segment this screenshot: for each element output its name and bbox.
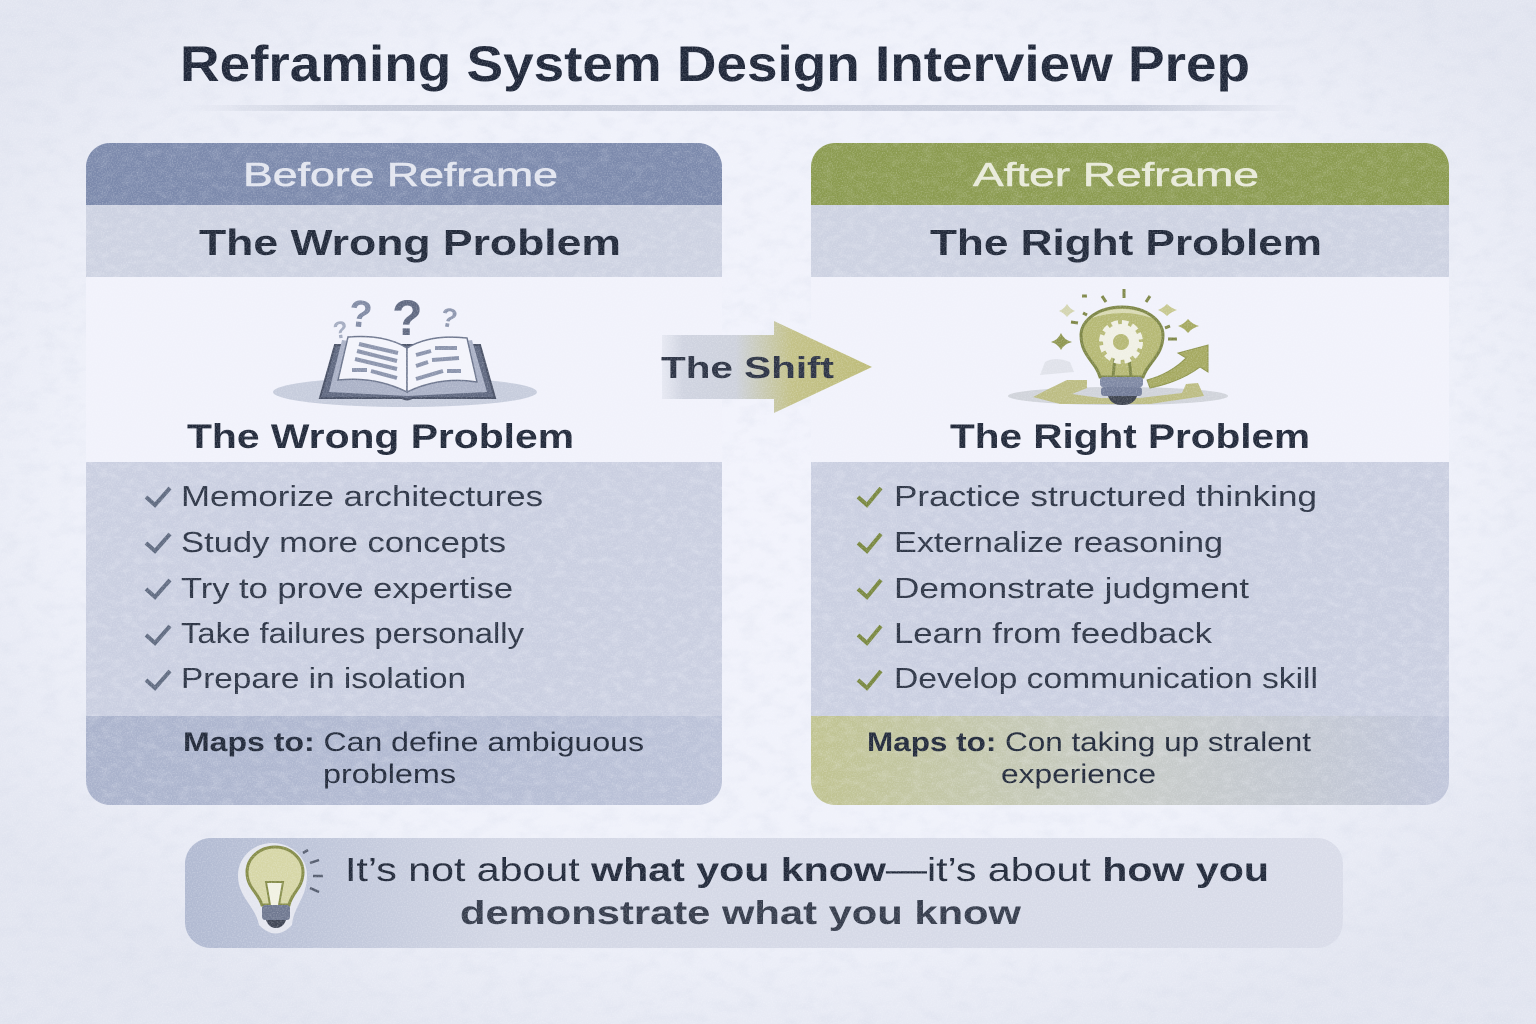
heading: the right problem: The Right Problem: [950, 418, 1310, 456]
footer: maps to (before): problems: [323, 759, 456, 789]
list item 4: Learn from feedback: [894, 618, 1213, 650]
list item 4: [144, 622, 524, 649]
list item 1: Memorize architectures: [181, 481, 543, 513]
icon: light bulb: [238, 843, 323, 934]
sub-header: the wrong problem: The Wrong Problem: [199, 222, 621, 263]
list item 3: [856, 577, 1249, 604]
list item 1: [856, 485, 1315, 512]
list item 1: [144, 485, 542, 508]
list item 5: Prepare in isolation: [181, 663, 466, 695]
sub-header: the wrong problem: [86, 205, 722, 277]
icon: open book with question marks: ?: [347, 293, 374, 337]
arrow: the shift: The Shift: [661, 350, 834, 385]
list item 2: Study more concepts: [181, 527, 506, 559]
header band: after reframe: [811, 143, 1449, 205]
panel body: [86, 281, 334, 422]
list item 1: Practice structured thinking: [894, 481, 1317, 513]
panel: before reframe: [86, 143, 722, 805]
icon: light bulb with gear and arrow: [1008, 289, 1228, 405]
callout: key takeaway: [185, 838, 1343, 948]
list item 4: [856, 622, 1212, 646]
header band: after reframe: After Reframe: [973, 156, 1259, 193]
list item 5: [856, 667, 1316, 694]
sub-header: the right problem: The Right Problem: [930, 222, 1322, 263]
sub-header: the right problem: [811, 205, 1449, 277]
icon: open book with question marks: ?: [392, 290, 423, 346]
list item 3: Demonstrate judgment: [894, 573, 1249, 605]
list item 5: [144, 667, 464, 694]
list panel: before: [86, 462, 722, 716]
arrow: the shift: [661, 321, 872, 413]
footer: maps to (before): Maps to: Can define ambiguous: [183, 727, 644, 757]
panel body: [970, 282, 1448, 432]
callout text: [345, 851, 1269, 931]
title: Reframing System Design Interview Prep: [180, 36, 1250, 92]
callout text: It’s not about what you know —it’s about how you: [345, 851, 1269, 888]
list item 4: Take failures personally: [181, 618, 525, 650]
header band: before reframe: Before Reframe: [243, 156, 558, 193]
panel: after reframe: [811, 143, 1449, 805]
icon: open book with question marks: ?: [438, 302, 460, 334]
list item 2: [144, 531, 505, 558]
icon: open book with question marks: ?: [331, 316, 350, 345]
list panel: after: [811, 462, 1449, 716]
footer: maps to (after): Maps to: Con taking up stralent: [867, 727, 1312, 757]
list item 3: [144, 577, 512, 604]
list item 2: Externalize reasoning: [894, 527, 1223, 559]
footer: maps to (before): [86, 716, 722, 805]
heading: the wrong problem: The Wrong Problem: [187, 418, 574, 456]
list item 2: [856, 531, 1221, 558]
list item 3: Try to prove expertise: [181, 573, 513, 605]
header band: before reframe: [86, 143, 722, 205]
footer: maps to (after): [811, 716, 1449, 805]
callout text: demonstrate what you know: [460, 894, 1021, 931]
footer: maps to (after): experience: [1001, 759, 1156, 789]
icon: open book with question marks: [273, 290, 537, 407]
list item 5: Develop communication skill: [894, 663, 1318, 695]
